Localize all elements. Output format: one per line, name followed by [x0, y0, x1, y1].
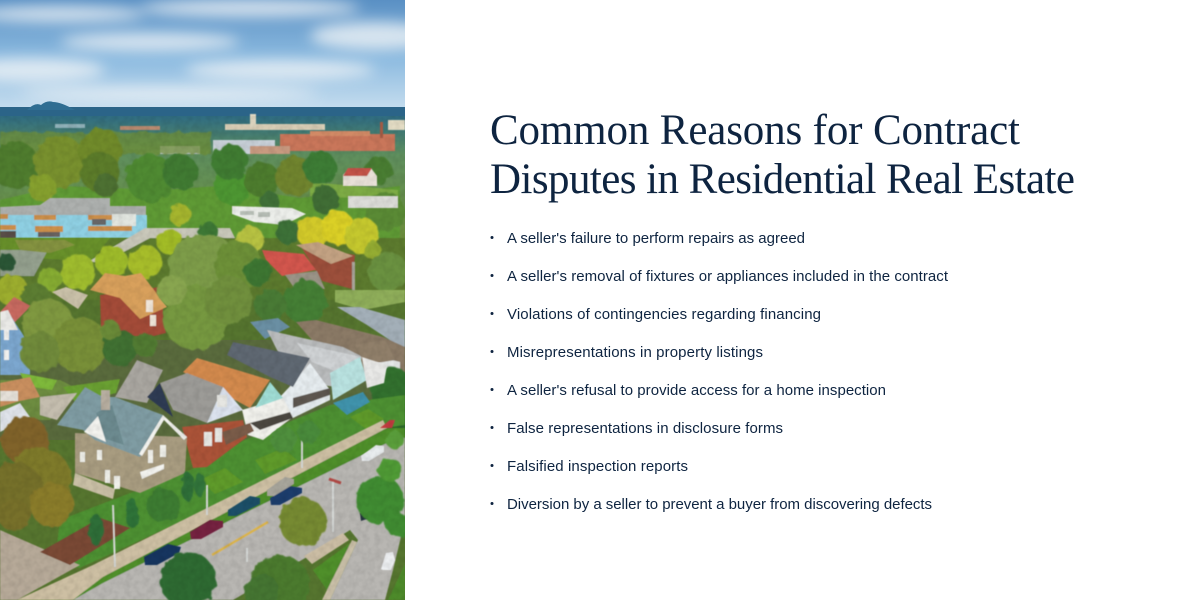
far neighborhood	[0, 114, 405, 240]
reason 4: Misrepresentations in property listings	[507, 344, 763, 361]
bulleted list of dispute reasons	[490, 230, 949, 513]
small red roof and blue house at left	[0, 297, 31, 375]
stone house with teal roof	[57, 387, 187, 499]
mid ground lawn, paths and pond	[0, 228, 405, 300]
house: gray roof with brick walls	[115, 360, 254, 468]
left small houses	[0, 377, 40, 432]
house: white with dark gray roof	[227, 342, 330, 418]
large central tree and left tree	[20, 234, 327, 373]
yards along the street	[0, 373, 405, 568]
brown brick house with orange roof	[52, 273, 167, 338]
foreground trees	[0, 416, 410, 600]
photo grain texture	[0, 116, 405, 600]
mid ground trees	[0, 204, 408, 316]
parked cars	[144, 420, 395, 570]
photo: aerial view of a residential neighborhood	[0, 0, 405, 600]
reason 3: Violations of contingencies regarding financing	[507, 306, 821, 323]
house: mint trim	[297, 343, 387, 415]
red-roof house on far right	[343, 168, 377, 186]
street poles	[113, 440, 341, 567]
reason 8: Diversion by a seller to prevent a buyer from discovering defects	[507, 496, 932, 513]
house cluster behind trees	[262, 242, 405, 310]
reason 7: Falsified inspection reports	[507, 458, 688, 475]
distant skyline with stadium	[0, 101, 405, 117]
title	[490, 107, 1075, 203]
left apartment building with cyan panels	[0, 198, 147, 238]
park trees	[0, 128, 405, 232]
tree behind the right edge	[370, 368, 415, 436]
white low building	[232, 196, 398, 225]
panel: text content	[490, 107, 1075, 513]
reason 2: A seller's removal of fixtures or appliances included in the contract	[507, 268, 949, 285]
house: orange roof with mint gable	[183, 358, 293, 440]
reason 6: False representations in disclosure forms	[507, 420, 783, 437]
street with side road	[0, 420, 405, 600]
title: Common Reasons for Contract	[490, 107, 1020, 154]
reason 5: A seller's refusal to provide access for a home inspection	[507, 382, 886, 399]
sky with clouds	[0, 0, 440, 108]
reason 1: A seller's failure to perform repairs as agreed	[507, 230, 805, 247]
title: Disputes in Residential Real Estate	[490, 156, 1075, 203]
upper right house roofs	[250, 307, 405, 387]
row of houses along the street	[57, 342, 387, 499]
ground base	[0, 116, 405, 600]
